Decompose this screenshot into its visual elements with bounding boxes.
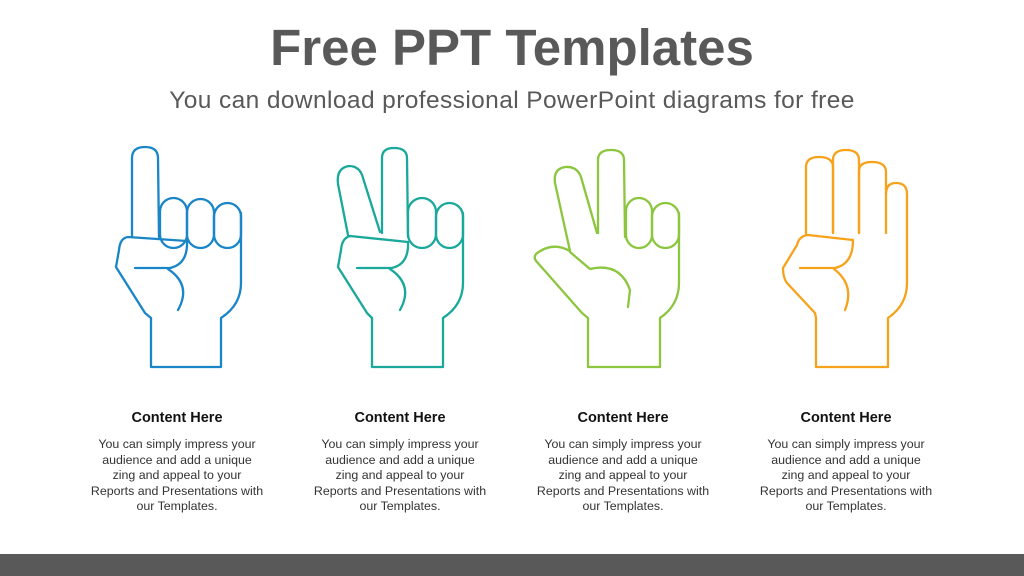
text block 3: You can simply impress your: [544, 437, 702, 451]
text block 2: You can simply impress your: [321, 437, 479, 451]
text block 3: zing and appeal to your: [559, 468, 687, 482]
text block 3: [537, 410, 709, 513]
text block 4: zing and appeal to your: [782, 468, 910, 482]
text block 2: our Templates.: [359, 499, 441, 513]
text block 2: Reports and Presentations with: [314, 484, 486, 498]
text block 1: You can simply impress your: [98, 437, 256, 451]
text block 4: [760, 410, 932, 513]
text block 3: audience and add a unique: [548, 452, 698, 466]
icon: hand one finger: [116, 147, 241, 367]
text block 4: You can simply impress your: [767, 437, 925, 451]
text block 3: Content Here: [577, 410, 669, 426]
text block 1: audience and add a unique: [102, 452, 252, 466]
text block 4: Content Here: [800, 410, 892, 426]
text block 1: Reports and Presentations with: [91, 484, 263, 498]
text block 4: our Templates.: [805, 499, 887, 513]
text block 3: Reports and Presentations with: [537, 484, 709, 498]
text block 2: Content Here: [354, 410, 446, 426]
text block 1: Content Here: [131, 410, 223, 426]
icon: hand four fingers: [783, 150, 907, 367]
text block 1: [91, 410, 263, 513]
title: Free PPT Templates: [270, 19, 754, 76]
text block 4: audience and add a unique: [771, 452, 921, 466]
text block 1: our Templates.: [136, 499, 218, 513]
icon: hand three fingers: [535, 150, 679, 367]
subtitle: You can download professional PowerPoint diagrams for free: [169, 87, 855, 114]
text block 4: Reports and Presentations with: [760, 484, 932, 498]
text block 2: audience and add a unique: [325, 452, 475, 466]
text block 1: zing and appeal to your: [113, 468, 241, 482]
text block 3: our Templates.: [582, 499, 664, 513]
footer bar: [0, 554, 1024, 576]
text block 2: [314, 410, 486, 513]
text block 2: zing and appeal to your: [336, 468, 464, 482]
icon: hand two fingers: [338, 148, 463, 367]
